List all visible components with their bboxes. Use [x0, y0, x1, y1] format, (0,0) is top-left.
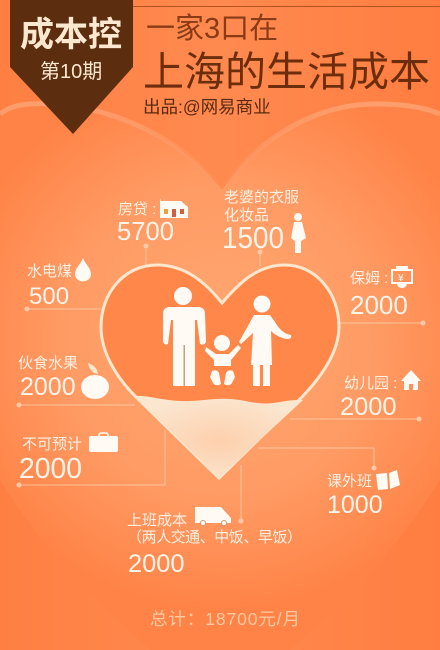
item: extracurricular: 1000: [327, 491, 383, 519]
item: extracurricular: [327, 470, 400, 519]
item: utilities: [27, 258, 91, 310]
total: 总计：18700元/月: [150, 609, 300, 629]
icon: house: [160, 198, 188, 218]
icon: child: [205, 335, 241, 385]
icon: truck: [195, 507, 231, 526]
item: kindergarten: [340, 370, 421, 421]
title line 1: 一家3口在: [146, 12, 278, 45]
item: utilities: 500: [29, 283, 69, 310]
connector lines: [16, 244, 426, 524]
icon: suitcase: [89, 433, 118, 452]
item: commuting: [127, 507, 302, 578]
item: extracurricular: 课外班: [327, 473, 372, 490]
icon: small house: [401, 370, 421, 390]
item: commuting: 上班成本: [127, 512, 187, 529]
item: commuting: 2000: [128, 550, 184, 578]
item: mortgage: [117, 198, 188, 246]
item: wife clothes and cosmetics: 1500: [222, 220, 284, 255]
icon: money screen: ¥: [397, 273, 404, 284]
item: mortgage: 5700: [117, 218, 174, 246]
item: commuting: （两人交通、中饭、早饭）: [127, 528, 302, 546]
badge title: 成本控: [20, 16, 122, 54]
item: nanny: 2000: [350, 290, 408, 320]
icon: water drop: [75, 258, 91, 282]
item: nanny: [350, 266, 412, 320]
icon: woman: [291, 213, 306, 253]
item: wife clothes and cosmetics: [222, 189, 306, 255]
icon: father: [163, 287, 206, 386]
item: food: 伙食水果: [18, 355, 78, 372]
icon: mother: [239, 296, 291, 386]
central heart: [101, 265, 339, 478]
top rule: [133, 6, 440, 7]
item: kindergarten: 2000: [340, 393, 396, 421]
item: mortgage: 房贷 :: [118, 201, 156, 218]
icon: apple: [81, 363, 109, 399]
title line 2: 上海的生活成本: [143, 49, 430, 95]
credit: 出品:@网易商业: [143, 97, 271, 117]
badge issue: 第10期: [40, 60, 102, 83]
item: unexpected: 不可预计: [22, 436, 82, 453]
icon: open book: [376, 470, 400, 490]
item: unexpected: [19, 433, 118, 485]
item: food: 2000: [20, 373, 76, 401]
item: unexpected: 2000: [19, 453, 82, 485]
item: utilities: 水电煤: [27, 263, 72, 280]
item: wife clothes and cosmetics: 老婆的衣服: [224, 189, 299, 206]
item: nanny: 保姆 :: [350, 270, 388, 287]
heart sand: [135, 396, 303, 478]
item: wife clothes and cosmetics: 化妆品: [224, 207, 269, 224]
item: kindergarten: 幼儿园 :: [344, 375, 397, 392]
ribbon badge: [10, 0, 133, 134]
item: food: [18, 355, 109, 401]
